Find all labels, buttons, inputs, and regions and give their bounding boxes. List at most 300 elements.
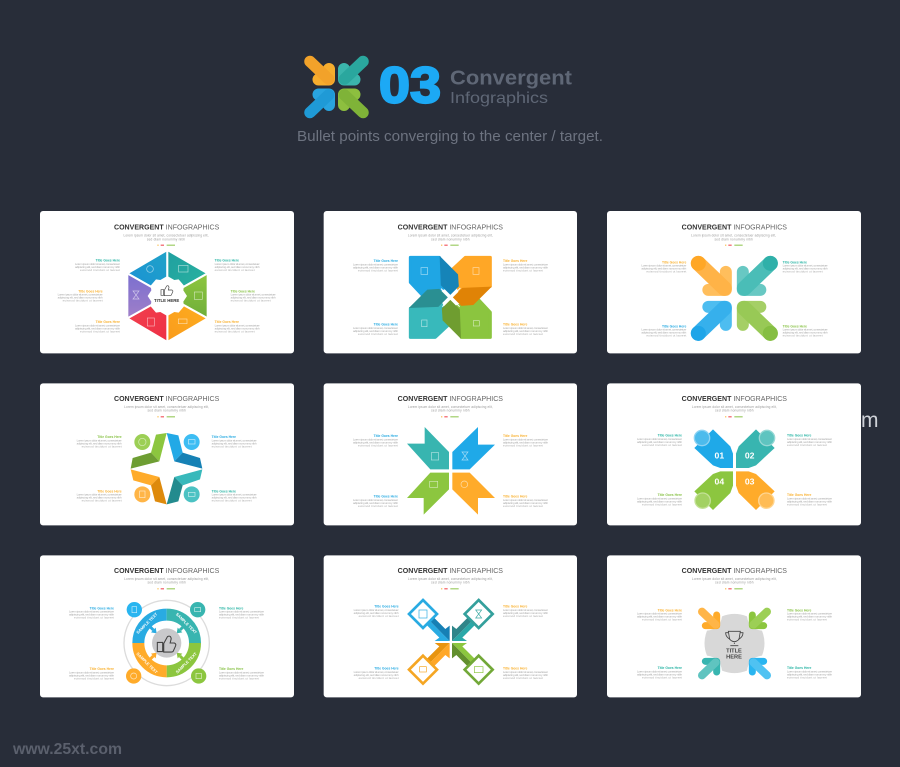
ring chart [138,615,195,671]
shaft and head: green [452,643,475,666]
ring label: top left: SAMPLE TEXT [135,611,159,635]
shape icons [421,268,479,327]
text block: top left [637,434,682,447]
slide intro text [692,405,777,413]
icon: thumbs up [161,286,173,296]
text block: bottom left: adipiscing elit, sed diam nonummy nibh [354,673,399,677]
text block: top left: Title Goes Here [658,608,682,612]
text block: bottom right: Lorem ipsum dolor sit amet, consectetuer [212,493,257,497]
text block: bottom right: euismod tincidunt ut laoreet [503,676,543,680]
text block: top left: Title Goes Here [374,605,399,609]
text block: top right [503,259,548,272]
text block: bottom right [787,666,832,679]
text block: bottom right: euismod tincidunt ut laoreet [787,675,827,679]
text block: bottom left: Title Goes Here [658,493,682,497]
segment: orange [167,296,208,342]
ring label: bottom right: SAMPLE TEXT [175,651,198,675]
text block: top left [77,435,122,448]
text block: top right: adipiscing elit, sed diam nonummy nibh [219,613,264,617]
diamond: orange [409,656,437,684]
text block: top right: Title Goes Here [503,434,528,438]
card background [607,383,861,525]
text block: top left [353,259,398,272]
card background [324,383,577,525]
text block: top right: adipiscing elit, sed diam nonummy nibh [503,611,548,615]
text block: top left [641,260,687,274]
ribbon: green [131,433,167,469]
text block: top left: euismod tincidunt ut laoreet [642,443,682,447]
logo arrow: blue [310,94,329,112]
text block: bottom left: Title Goes Here [662,324,686,328]
inward arrow: blue [149,626,157,633]
slide intro text: sed diam nonummy nibh [431,237,470,241]
text block: middle right: Lorem ipsum dolor sit amet, consectetuer [231,293,276,297]
text block: bottom right: Title Goes Here [503,495,528,499]
slide intro text [124,577,209,585]
text block: bottom right [503,495,548,508]
center gear with title [148,276,187,316]
accent dashes [441,244,459,247]
card background [40,555,294,697]
text block: bottom left [77,489,122,503]
ring label: bottom left: SAMPLE TEXT [135,651,159,675]
logo: four converging arrows [310,62,363,112]
center label: TITLE [726,648,742,654]
icon circle: teal [184,486,200,502]
text block: top right [503,434,548,447]
text block: bottom right: adipiscing elit, sed diam nonummy nibh [783,331,828,335]
text block: top right: Lorem ipsum dolor sit amet, consectetuer [503,437,548,441]
shaft and head: blue [427,618,450,641]
ring label: top right: SAMPLE TEXT [175,612,198,635]
text block: top left: Lorem ipsum dolor sit amet, consectetuer [641,264,686,268]
text block: top right [219,606,264,620]
text block: top right: euismod tincidunt ut laoreet [787,443,827,447]
text block: top right [783,260,828,274]
segment: green [167,273,208,318]
text block: top right: adipiscing elit, sed diam nonummy nibh [783,267,828,271]
text block: bottom right: euismod tincidunt ut laoreet [215,329,255,333]
slide heading: CONVERGENT INFOGRAPHICS [398,394,503,403]
text block: bottom left: Lorem ipsum dolor sit amet, consectetuer [75,323,120,327]
text block: bottom left: adipiscing elit, sed diam nonummy nibh [69,673,114,677]
logo arrow: teal [344,62,363,80]
text block: bottom right [219,667,264,680]
text block: bottom left: Lorem ipsum dolor sit amet, consectetuer [637,669,682,673]
hexagon chart [127,250,208,342]
tag: 03 orange: 03 [745,477,755,487]
text block: bottom right: Lorem ipsum dolor sit amet, consectetuer [503,498,548,502]
text block: middle left [58,289,103,303]
text block: top left [354,605,399,618]
text block: top left [637,608,682,622]
text block: top left: adipiscing elit, sed diam nonummy nibh [637,615,682,619]
accent dashes [157,244,175,247]
center label [726,648,742,660]
panel: slide 8 diamonds [324,555,577,697]
text block: bottom right: Title Goes Here [503,323,528,327]
text block: bottom right: adipiscing elit, sed diam nonummy nibh [503,673,548,677]
text block: top right: euismod tincidunt ut laoreet [503,443,543,447]
diamond: blue [409,600,437,628]
text block: bottom right: euismod tincidunt ut laoreet [219,676,259,680]
text block: bottom right: Title Goes Here [787,666,812,670]
text block: bottom right: adipiscing elit, sed diam nonummy nibh [215,326,260,330]
text block: middle left: Lorem ipsum dolor sit amet, consectetuer [58,293,103,297]
text block: bottom left: Lorem ipsum dolor sit amet, consectetuer [77,493,122,497]
text block: top right [215,259,260,272]
text block: bottom right: Title Goes Here [787,493,812,497]
text block: middle right: adipiscing elit, sed diam nonummy nibh [231,296,276,300]
text block: top left: Lorem ipsum dolor sit amet, consectetuer [77,438,122,442]
text block: middle left: Title Goes Here [78,289,103,293]
text block: top left: Title Goes Here [662,260,686,264]
text block: top left: euismod tincidunt ut laoreet [82,444,122,448]
slide intro text: Lorem ipsum dolor sit amet, consectetuer adipiscing elit, [124,577,209,581]
text block: bottom left: euismod tincidunt ut laoreet [80,329,120,333]
text block: top left: Title Goes Here [374,434,398,438]
slide intro text: Lorem ipsum dolor sit amet, consectetuer adipiscing elit, [691,234,776,238]
text block: bottom right: euismod tincidunt ut laoreet [212,499,252,503]
inward arrow: orange [149,653,157,660]
slide intro text [124,405,209,413]
text block: bottom left: Title Goes Here [374,667,399,671]
text block: top right: euismod tincidunt ut laoreet [503,268,543,272]
text block: top left: adipiscing elit, sed diam nonummy nibh [77,441,122,445]
text block: bottom left: Lorem ipsum dolor sit amet, consectetuer [353,326,398,330]
text block: top left: euismod tincidunt ut laoreet [642,618,682,622]
text block: top left [75,259,120,272]
text block: top left: adipiscing elit, sed diam nonummy nibh [354,611,399,615]
text block: top left: euismod tincidunt ut laoreet [358,443,398,447]
text block: top left: Lorem ipsum dolor sit amet, consectetuer [353,437,398,441]
text block: middle right: euismod tincidunt ut laoreet [231,299,271,303]
text block: top right: euismod tincidunt ut laoreet [212,444,252,448]
text block: top left: adipiscing elit, sed diam nonummy nibh [75,265,120,269]
slide intro text: sed diam nonummy nibh [715,581,754,585]
ring segment: orange [138,643,167,671]
fold: green [442,300,461,339]
text block: top right: euismod tincidunt ut laoreet [783,270,823,274]
segment: purple [127,273,167,318]
text block: bottom right: euismod tincidunt ut laoreet [503,504,543,508]
slide heading: CONVERGENT INFOGRAPHICS [682,566,787,575]
tag: 01 blue: 01 [715,451,724,461]
shape: blue [410,257,445,297]
slide intro text: Lorem ipsum dolor sit amet, consectetuer adipiscing elit, [408,577,493,581]
text block: bottom right: adipiscing elit, sed diam nonummy nibh [212,496,257,500]
text block: bottom left [641,324,687,338]
text block: bottom left: Title Goes Here [374,323,398,327]
text block: bottom left: Title Goes Here [658,666,682,670]
text block: bottom right [212,489,257,503]
text block: top left: euismod tincidunt ut laoreet [80,268,120,272]
arrow: teal [743,256,778,290]
text block: bottom left: Title Goes Here [96,320,120,324]
ribbon: orange [131,469,167,504]
text block: top right: Title Goes Here [787,608,812,612]
slide intro text: sed diam nonummy nibh [147,409,186,413]
slide intro text [691,234,776,241]
text block: top left [69,606,114,620]
slide intro text: Lorem ipsum dolor sit amet, consectetuer adipiscing elit, [692,405,777,409]
fold: teal [409,289,448,308]
text block: bottom left: Lorem ipsum dolor sit amet, consectetuer [641,328,686,332]
text block: bottom right: adipiscing elit, sed diam nonummy nibh [503,501,548,505]
text block: bottom right: adipiscing elit, sed diam nonummy nibh [787,499,832,503]
text block: top left: euismod tincidunt ut laoreet [359,614,399,618]
text block: bottom right: Title Goes Here [219,667,244,671]
text block: top left: adipiscing elit, sed diam nonummy nibh [641,267,687,271]
text block: middle right: Title Goes Here [231,289,255,293]
slide heading: CONVERGENT INFOGRAPHICS [682,223,787,232]
text block: top left: euismod tincidunt ut laoreet [358,268,398,272]
text block: top right: Lorem ipsum dolor sit amet, consectetuer [503,262,548,266]
slide intro text: Lorem ipsum dolor sit amet, consectetuer adipiscing elit, [408,405,493,409]
icon circle: blue [184,434,200,450]
slide intro text [408,234,493,241]
text block: top right: Lorem ipsum dolor sit amet, consectetuer [215,262,260,266]
text block: top left: Title Goes Here [96,259,120,263]
text block: top left: adipiscing elit, sed diam nonummy nibh [353,265,398,269]
slide intro text: Lorem ipsum dolor sit amet, consectetuer adipiscing elit, [692,577,777,581]
text block: bottom left [353,495,398,508]
text block: top right: Title Goes Here [503,605,528,609]
text block: top left: euismod tincidunt ut laoreet [646,270,686,274]
text block: top right: Lorem ipsum dolor sit amet, consectetuer [212,438,257,442]
text block: top left: Lorem ipsum dolor sit amet, consectetuer [69,610,114,614]
text block: bottom right: euismod tincidunt ut laoreet [503,332,543,336]
text block: top right: adipiscing elit, sed diam nonummy nibh [787,440,832,444]
subtitle: Bullet points converging to the center / target. [297,129,603,145]
text block: top right: Lorem ipsum dolor sit amet, consectetuer [503,608,548,612]
text block: bottom right: Lorem ipsum dolor sit amet, consectetuer [219,670,264,674]
text block: top right: adipiscing elit, sed diam nonummy nibh [787,615,832,619]
diamond: teal [465,600,493,628]
icon: trophy [726,631,743,646]
text block: bottom right [503,323,548,336]
text block: bottom right: Lorem ipsum dolor sit amet, consectetuer [787,669,832,673]
text block: bottom right: Title Goes Here [503,667,528,671]
text block: bottom right [215,320,260,333]
text block: bottom left: Title Goes Here [90,667,114,671]
text block: bottom left: adipiscing elit, sed diam nonummy nibh [353,329,398,333]
shape: orange [450,257,490,292]
text block: middle left: euismod tincidunt ut laoreet [63,299,103,303]
arrow: teal [407,427,449,469]
text block: top right [787,434,832,447]
text block: bottom right: euismod tincidunt ut laoreet [783,334,823,338]
panel: slide 6 numbered tags [607,383,861,525]
ring segment: green [167,643,195,671]
inward arrow: teal [177,626,184,633]
ribbon star chart [131,433,202,504]
segment icons [133,265,202,326]
slide intro text: sed diam nonummy nibh [147,581,186,585]
text block: top left: euismod tincidunt ut laoreet [74,616,114,620]
text block: bottom left: Title Goes Here [374,495,398,499]
tag: 02 teal: 02 [745,451,755,461]
panel: slide 2 folded squares [324,211,577,353]
slide heading: CONVERGENT INFOGRAPHICS [114,566,219,575]
text block: top left: adipiscing elit, sed diam nonummy nibh [353,440,398,444]
text block: bottom left: euismod tincidunt ut laoreet [646,334,686,338]
text block: top left: Lorem ipsum dolor sit amet, consectetuer [353,262,398,266]
slide intro text: Lorem ipsum dolor sit amet, consectetuer adipiscing elit, [124,405,209,409]
slide heading: CONVERGENT INFOGRAPHICS [682,394,787,403]
inward arrow: green [177,653,184,660]
segment: red [127,296,167,342]
text block: bottom left: Lorem ipsum dolor sit amet, consectetuer [69,670,114,674]
center white cross lines [441,288,460,307]
center label: HERE [726,654,742,660]
card background [324,211,577,353]
text block: bottom right [503,667,548,680]
fold: orange [453,287,492,306]
icon circle: orange [126,668,141,684]
panel: slide 5 pointed arrows [324,383,577,525]
text block: top right: adipiscing elit, sed diam nonummy nibh [503,440,548,444]
text block: top right: Lorem ipsum dolor sit amet, consectetuer [787,612,832,616]
text block: bottom left: adipiscing elit, sed diam nonummy nibh [77,496,122,500]
text block: top right: euismod tincidunt ut laoreet [503,614,543,618]
text block: top right: Lorem ipsum dolor sit amet, consectetuer [219,610,264,614]
heading: Convergent: Convergent [450,68,572,90]
text block: top right: Lorem ipsum dolor sit amet, consectetuer [783,264,828,268]
text block: bottom left: adipiscing elit, sed diam nonummy nibh [641,331,687,335]
arrow: teal [702,661,717,675]
text block: bottom right: adipiscing elit, sed diam nonummy nibh [787,672,832,676]
text block: top right: Title Goes Here [783,260,807,264]
slide intro text [408,405,493,413]
slide intro text: sed diam nonummy nibh [715,409,754,413]
text block: top left: Title Goes Here [374,259,398,263]
accent dashes [725,588,743,589]
card background [324,555,577,697]
slide intro text: sed diam nonummy nibh [431,409,470,413]
text block: bottom left: euismod tincidunt ut laoreet [642,502,682,506]
text block: bottom left: adipiscing elit, sed diam nonummy nibh [637,672,682,676]
slide intro text: sed diam nonummy nibh [714,237,753,241]
panel: slide 9 arrows to trophy [607,555,861,697]
accent dashes [157,588,175,589]
text block: bottom left: euismod tincidunt ut laoreet [74,676,114,680]
text block: top right: euismod tincidunt ut laoreet [787,618,827,622]
text block: bottom left: Lorem ipsum dolor sit amet, consectetuer [353,498,398,502]
text block: bottom right: Title Goes Here [212,489,236,493]
text block: bottom left: Lorem ipsum dolor sit amet, consectetuer [354,670,399,674]
segment: teal [167,250,208,296]
slide heading: CONVERGENT INFOGRAPHICS [114,394,219,403]
icon circle: blue [127,602,142,617]
text block: bottom right [783,324,828,338]
diamond: green [465,656,493,684]
arrow: orange [452,473,495,515]
ribbon: teal [167,469,202,504]
ribbon: blue [167,433,202,469]
ring labels [135,611,198,675]
text block: top right: Title Goes Here [215,259,239,263]
text block: bottom left: euismod tincidunt ut laoreet [359,676,399,680]
text block: bottom left: adipiscing elit, sed diam nonummy nibh [353,501,398,505]
text block: top left: Title Goes Here [97,435,122,439]
arrow: green [752,612,767,626]
text block: bottom right: euismod tincidunt ut laoreet [787,502,827,506]
text block: bottom right: adipiscing elit, sed diam nonummy nibh [503,329,548,333]
text block: top right: adipiscing elit, sed diam nonummy nibh [503,265,548,269]
text block: bottom left: Title Goes Here [97,489,122,493]
watermark: fragment at right: m [861,409,878,432]
tag: 04 green: 04 [715,477,724,487]
text block: top right [787,608,832,622]
panel: slide 1 hexagon [40,211,294,353]
slide intro text: sed diam nonummy nibh [147,237,185,241]
text block: top left [353,434,398,447]
arrow: blue [452,427,495,469]
text block: top left: Lorem ipsum dolor sit amet, consectetuer [75,262,120,266]
number 03: 03 [379,56,441,114]
slide intro text: Lorem ipsum dolor sit amet, consectetuer adipiscing elit, [408,234,493,238]
text block: bottom right: Lorem ipsum dolor sit amet, consectetuer [783,328,828,332]
center circle with thumbs up [152,628,181,658]
text block: bottom right: Title Goes Here [215,320,239,324]
text block: top left: Lorem ipsum dolor sit amet, consectetuer [637,612,682,616]
text block: middle left: adipiscing elit, sed diam nonummy nibh [58,296,103,300]
text block: top right [503,605,548,618]
text block: top left: Title Goes Here [90,606,114,610]
text block: bottom left: euismod tincidunt ut laoreet [358,504,398,508]
text block: top right: euismod tincidunt ut laoreet [219,616,259,620]
outer grey ring [124,600,209,686]
text block: bottom right: Title Goes Here [783,324,807,328]
shape: green [455,297,490,337]
text block: top left: Lorem ipsum dolor sit amet, consectetuer [637,437,682,441]
watermark: left bottom: www.25xt.com [12,741,122,758]
tag: 01 blue [694,429,733,468]
text block: bottom left: euismod tincidunt ut laoreet [642,675,682,679]
logo arrow: green [344,94,363,112]
text block: top right: adipiscing elit, sed diam nonummy nibh [212,441,257,445]
accent dashes [157,416,175,417]
icon circle: orange [134,486,150,502]
panel: slide 4 ribbon star [40,383,294,525]
slide heading: CONVERGENT INFOGRAPHICS [398,566,503,575]
text block: bottom right: Lorem ipsum dolor sit amet, consectetuer [503,326,548,330]
text block: bottom right: adipiscing elit, sed diam nonummy nibh [219,673,264,677]
text block: bottom left: euismod tincidunt ut laoreet [358,332,398,336]
text block: top right: euismod tincidunt ut laoreet [215,268,255,272]
text block: top right: adipiscing elit, sed diam nonummy nibh [215,265,260,269]
segment: blue [127,250,167,296]
arrow: orange [702,612,717,626]
icon circle: teal [190,602,205,617]
heading: Infographics: Infographics [450,90,548,107]
shaft and head: teal [452,618,475,641]
text block: bottom right: Lorem ipsum dolor sit amet, consectetuer [215,323,260,327]
text block: bottom left [353,323,398,336]
text block: top right: Lorem ipsum dolor sit amet, consectetuer [787,437,832,441]
card background [40,211,294,353]
slide heading: CONVERGENT INFOGRAPHICS [114,223,219,232]
accent dashes [725,416,743,417]
text block: middle right [231,289,276,303]
slide intro text: sed diam nonummy nibh [431,581,470,585]
text block: bottom left: adipiscing elit, sed diam nonummy nibh [637,499,682,503]
center label: TITLE HERE [154,298,180,304]
inward arrows [149,626,184,660]
ring segment: teal [167,615,195,643]
accent dashes [725,244,743,247]
